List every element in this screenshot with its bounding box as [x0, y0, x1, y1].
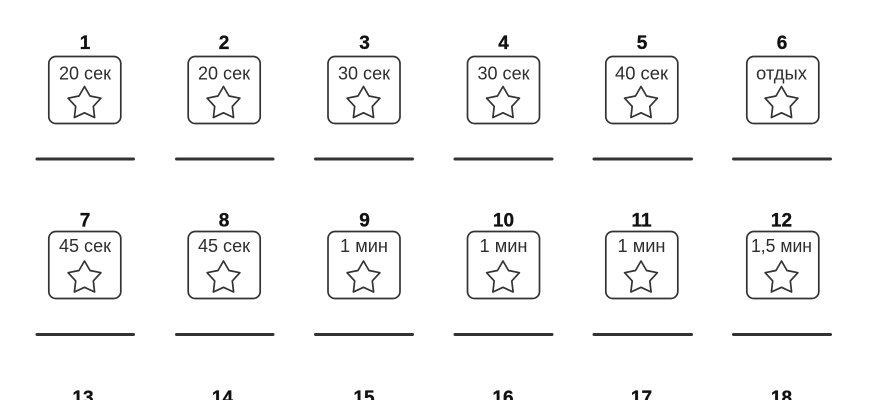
item 9 — [316, 210, 412, 334]
item 4: 30 сек — [478, 62, 530, 84]
item 1 — [37, 33, 134, 159]
item 12: 12 — [771, 210, 792, 232]
item 7: 7 — [80, 210, 90, 232]
item 8: 45 сек — [198, 235, 251, 256]
item 6: отдых — [756, 62, 808, 84]
item 7: 45 сек — [59, 235, 112, 256]
item 4: 4 — [498, 33, 509, 54]
item 2: 2 — [219, 33, 229, 54]
item 6: 6 — [777, 33, 787, 54]
item 2 — [176, 33, 273, 159]
item 4 — [455, 33, 552, 159]
item 5 — [594, 33, 692, 159]
item 8: 8 — [219, 210, 229, 232]
item 10 — [455, 210, 552, 334]
item 5: 40 сек — [615, 62, 669, 84]
item 1: 20 сек — [59, 62, 112, 84]
item 10: 10 — [493, 210, 514, 232]
item 10: 1 мин — [480, 235, 528, 256]
item 9: 9 — [359, 210, 370, 232]
item 8 — [176, 210, 273, 334]
item 9: 1 мин — [340, 235, 388, 256]
item 3: 3 — [359, 33, 370, 54]
item 3 — [316, 33, 412, 159]
item 11: 11 — [631, 210, 652, 232]
item 5: 5 — [637, 33, 648, 54]
item 11: 1 мин — [618, 235, 666, 256]
item 1: 1 — [80, 33, 91, 54]
item 11 — [594, 210, 692, 334]
item 3: 30 сек — [338, 62, 391, 84]
item 12: 1,5 мин — [751, 235, 812, 256]
item 12 — [734, 210, 830, 334]
item 7 — [37, 210, 134, 334]
item 6 — [734, 33, 830, 159]
item 2: 20 сек — [198, 62, 251, 84]
